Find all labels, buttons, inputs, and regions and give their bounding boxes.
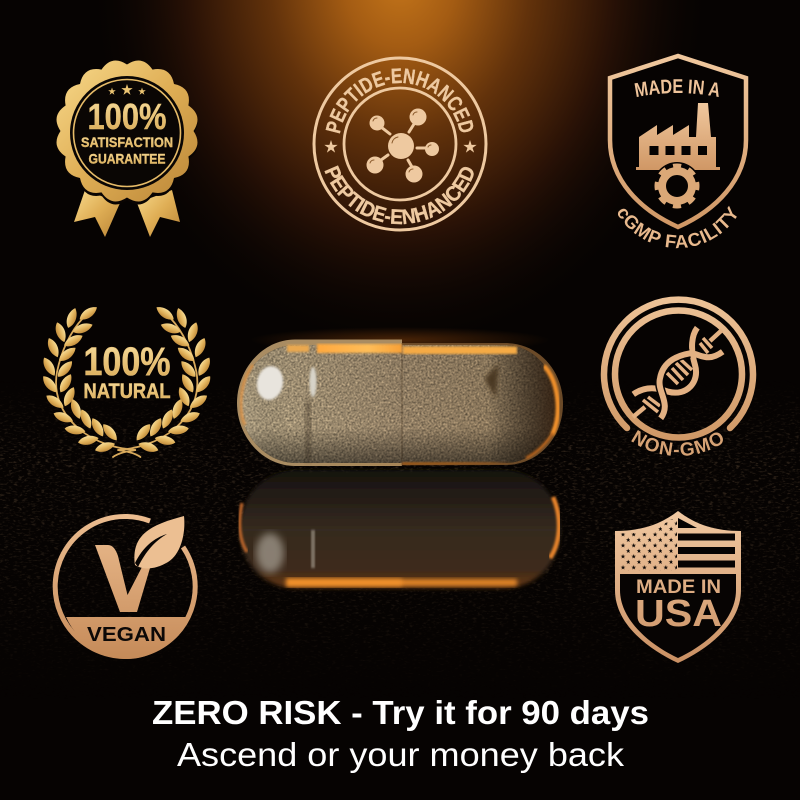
- v mark: [95, 545, 150, 612]
- natural text: 100%: [84, 340, 170, 384]
- three stars: [108, 84, 146, 95]
- rings: [604, 300, 753, 438]
- badge: non-gmo: [600, 296, 756, 456]
- badge: made in usa: [615, 511, 741, 663]
- guarantee subline: Ascend or your money back: [177, 736, 625, 773]
- powder fill: [240, 345, 558, 463]
- arc text: PEPTIDE-ENHANCED: [324, 165, 474, 224]
- natural text: NATURAL: [84, 379, 170, 403]
- natural text: [84, 340, 170, 403]
- capsule shell: [400, 343, 563, 465]
- left rim: [241, 365, 253, 425]
- leaf icon: [134, 516, 184, 568]
- seal text: 100%: [88, 96, 166, 137]
- rings: [314, 58, 486, 230]
- arc text: PEPTIDE-ENHANCED: [326, 68, 474, 134]
- capsule: [237, 327, 563, 466]
- shield: [615, 511, 741, 663]
- orange right crescent: [545, 367, 558, 433]
- non-gmo text: NON-GMO: [631, 430, 723, 456]
- badge: peptide-enhanced: [312, 56, 488, 232]
- seal text: GUARANTEE: [88, 150, 166, 166]
- made in a text: MADE IN A: [634, 79, 719, 97]
- dna helix: [633, 328, 723, 418]
- badge: vegan: [55, 516, 195, 659]
- orange bottom rim: [290, 462, 512, 465]
- capsule reflection: [240, 470, 560, 588]
- vegan text: VEGAN: [87, 624, 166, 646]
- star field: [620, 519, 677, 571]
- powder dark patch: [485, 364, 499, 398]
- badge: 100% natural laurel: [40, 304, 213, 457]
- capsule shading: [240, 345, 558, 463]
- badge: made in a cGMP facility: [608, 54, 748, 248]
- arc text: [324, 68, 474, 224]
- factory icon: [636, 103, 720, 170]
- orange top highlight: [287, 344, 517, 354]
- usa text: MADE IN: [636, 577, 721, 598]
- right laurel branch: [117, 304, 213, 457]
- ring: [55, 516, 195, 656]
- usa text: USA: [635, 593, 722, 635]
- side stars: [324, 140, 477, 153]
- cGMP facility text: cGMP FACILITY: [618, 206, 737, 248]
- shield outline: [610, 56, 746, 227]
- flag stripes: [678, 518, 735, 568]
- capsule glow: [250, 327, 550, 353]
- lower panel: [620, 574, 736, 658]
- scalloped seal: [57, 61, 197, 204]
- gear icon: [653, 162, 701, 210]
- molecule icon: [366, 108, 439, 182]
- left laurel branch: [40, 304, 136, 457]
- band seam: [402, 343, 403, 466]
- seal text: SATISFACTION: [81, 134, 173, 150]
- seal text: [81, 96, 173, 166]
- guarantee headline: ZERO RISK - Try it for 90 days: [152, 694, 649, 731]
- badge: 100% satisfaction guarantee: [57, 61, 197, 237]
- usa text: [635, 577, 722, 635]
- ribbons: [74, 190, 180, 237]
- specular highlights: [254, 364, 286, 402]
- lower segment: [66, 617, 188, 659]
